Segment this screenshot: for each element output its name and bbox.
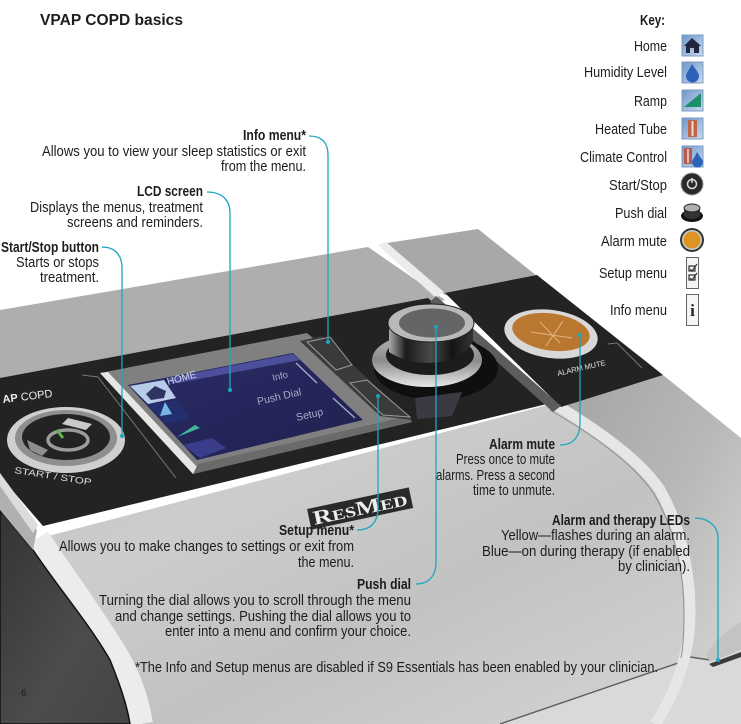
LCD screen: Push Dial [256, 386, 302, 408]
text: setup menu: Setup menu* [279, 523, 354, 539]
key labels: Push dial [615, 206, 667, 222]
info and setup buttons [307, 337, 410, 417]
text: push dial: Push dial [357, 577, 411, 593]
icon: heated tube [682, 118, 703, 139]
text: alarm mute: Press once to mute [456, 452, 555, 468]
push dial [372, 304, 498, 419]
text: setup menu: the menu. [298, 555, 354, 571]
key labels [580, 13, 667, 319]
text: push dial: enter into a menu and confirm your choice. [165, 624, 411, 640]
left white trim strip [38, 538, 141, 724]
key labels: Setup menu [599, 266, 667, 282]
text: info menu: Info menu* [243, 128, 306, 144]
top white trim strip [378, 242, 444, 298]
left gray wedge [0, 480, 37, 550]
text: push dial: and change settings. Pushing the dial allows you to [115, 609, 411, 625]
left chrome edge [0, 473, 38, 533]
icon: home [682, 35, 703, 56]
start stop button [7, 407, 125, 473]
dark side of device [0, 510, 130, 724]
icon: ramp [682, 90, 703, 111]
text: push dial: Turning the dial allows you to scroll through the menu [99, 593, 411, 609]
ResMed logo: RESMED [311, 488, 410, 530]
text: alarm mute: time to unmute. [473, 483, 555, 499]
LCD screen bezel [100, 333, 412, 474]
icon: info menu [686, 294, 698, 326]
text: alarm mute [436, 437, 555, 499]
callout dots [120, 325, 720, 662]
key labels: Heated Tube [595, 122, 667, 138]
LED slot [706, 622, 741, 662]
page number: 6 [21, 688, 27, 699]
black control panel right [445, 275, 663, 407]
text: LCD screen: Displays the menus, treatment [30, 200, 203, 216]
text: start stop button [1, 240, 99, 286]
icon: humidity [682, 62, 703, 83]
LCD screen: HOME [166, 369, 198, 388]
key labels: Ramp [634, 94, 667, 110]
key labels: Start/Stop [609, 178, 667, 194]
icon: climate control [682, 146, 703, 168]
device photo [0, 229, 741, 724]
text: start stop button: Starts or stops [16, 255, 99, 271]
key labels: Humidity Level [584, 65, 667, 81]
right white trim strip [556, 405, 690, 724]
icon: start stop [681, 173, 703, 195]
text: alarm and therapy LEDs: Alarm and therapy LEDs [552, 513, 690, 529]
key labels: Key: [640, 13, 665, 29]
text: setup menu: Allows you to make changes to settings or exit from [59, 539, 354, 555]
key labels: Climate Control [580, 150, 667, 166]
icon: info menu: i [690, 301, 695, 320]
COPD label on panel: AP COPD [2, 388, 53, 406]
black control panel left [0, 298, 551, 526]
device right silver surface [555, 375, 741, 724]
alarm mute button [501, 304, 601, 364]
text: alarm mute: Alarm mute [489, 437, 555, 453]
text: start stop button: Start/Stop button [1, 240, 99, 256]
key labels: Home [634, 39, 667, 55]
LCD screen: Info [271, 370, 289, 384]
text: alarm mute: alarms. Press a second [436, 468, 555, 484]
device top silver surface right [387, 229, 537, 295]
icon: alarm mute [680, 228, 704, 252]
text: alarm and therapy LEDs [482, 513, 690, 575]
bottom right shell [500, 650, 741, 724]
text: LCD screen [30, 184, 203, 231]
key labels: Alarm mute [601, 234, 667, 250]
text: info menu: Allows you to view your sleep statistics or exit [42, 144, 306, 160]
text: alarm and therapy LEDs: by clinician). [618, 559, 690, 575]
title: VPAP COPD basics [40, 12, 183, 29]
text: info menu: from the menu. [221, 159, 306, 175]
LCD screen [128, 353, 363, 460]
text: info menu [42, 128, 306, 175]
start stop engraved label: START / STOP [14, 465, 92, 487]
icon: setup menu [686, 258, 698, 288]
text: start stop button: treatment. [40, 270, 99, 286]
icon: push dial [681, 204, 703, 222]
key labels: Info menu [610, 303, 667, 319]
text: alarm and therapy LEDs: Blue—on during therapy (if enabled [482, 544, 690, 560]
callout lines [102, 136, 718, 660]
footnote: *The Info and Setup menus are disabled if S9 Essentials has been enabled by your clinician. [135, 660, 658, 676]
device front silver surface [33, 403, 690, 724]
text: LCD screen: LCD screen [137, 184, 203, 200]
device top silver surface left [0, 247, 445, 400]
text: setup menu [59, 523, 354, 571]
LCD screen: Setup [295, 406, 325, 424]
text: LCD screen: screens and reminders. [67, 215, 203, 231]
text: push dial [99, 577, 411, 640]
alarm mute engraved label: ALARM MUTE [556, 358, 606, 378]
text: alarm and therapy LEDs: Yellow—flashes during an alarm. [501, 528, 690, 544]
